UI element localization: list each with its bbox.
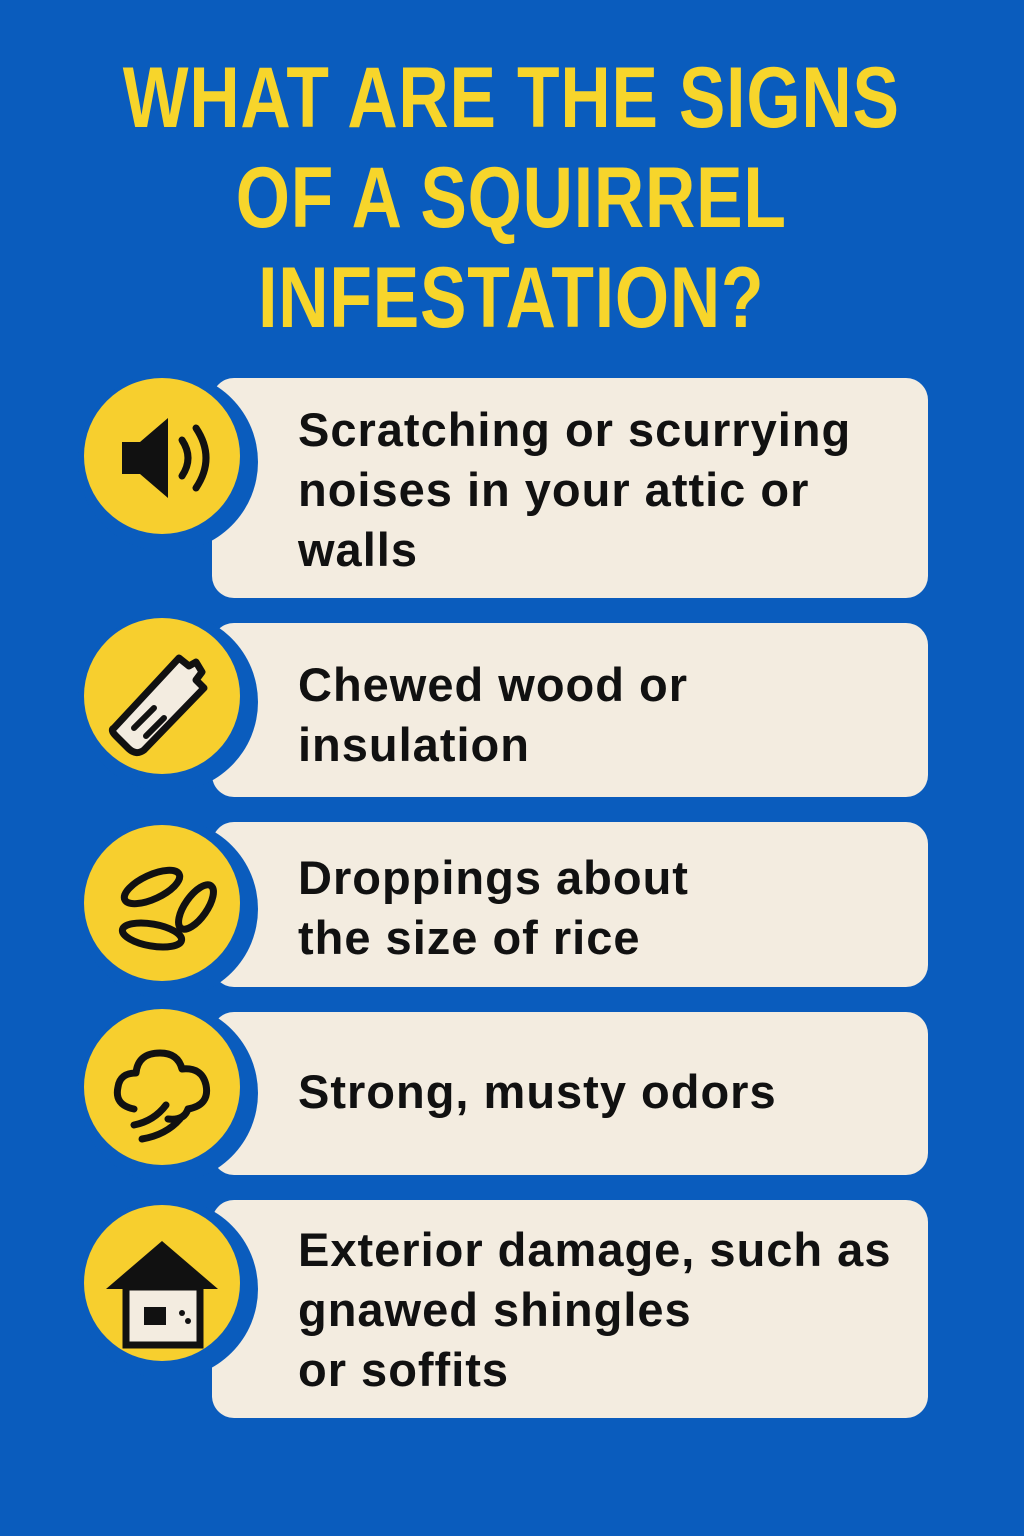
icon: droppings xyxy=(78,819,258,999)
panel: noises xyxy=(84,378,928,598)
text: or soffits xyxy=(298,1343,509,1396)
panel: droppings xyxy=(84,822,928,987)
title xyxy=(122,50,900,346)
icon: chewed wood xyxy=(78,612,258,792)
title: WHAT ARE THE SIGNS xyxy=(123,50,900,146)
title: INFESTATION? xyxy=(258,250,764,346)
text xyxy=(298,403,851,576)
panel: exterior damage xyxy=(84,1200,928,1418)
text xyxy=(298,1223,891,1396)
text xyxy=(298,851,689,964)
text: gnawed shingles xyxy=(298,1283,692,1336)
panel: odors xyxy=(84,1009,928,1175)
panel: chewed wood xyxy=(84,618,928,797)
text xyxy=(298,658,688,771)
text: Chewed wood or xyxy=(298,658,688,711)
text: Exterior damage, such as xyxy=(298,1223,891,1276)
text: insulation xyxy=(298,718,530,771)
text: the size of rice xyxy=(298,911,640,964)
text: Strong, musty odors xyxy=(298,1065,777,1118)
icon: house xyxy=(78,1199,258,1379)
icon: odor cloud xyxy=(78,1003,258,1183)
text: walls xyxy=(298,523,418,576)
text: Droppings about xyxy=(298,851,689,904)
icon: speaker xyxy=(78,372,258,552)
text: noises in your attic or xyxy=(298,463,809,516)
text: Scratching or scurrying xyxy=(298,403,851,456)
title: OF A SQUIRREL xyxy=(236,150,787,246)
